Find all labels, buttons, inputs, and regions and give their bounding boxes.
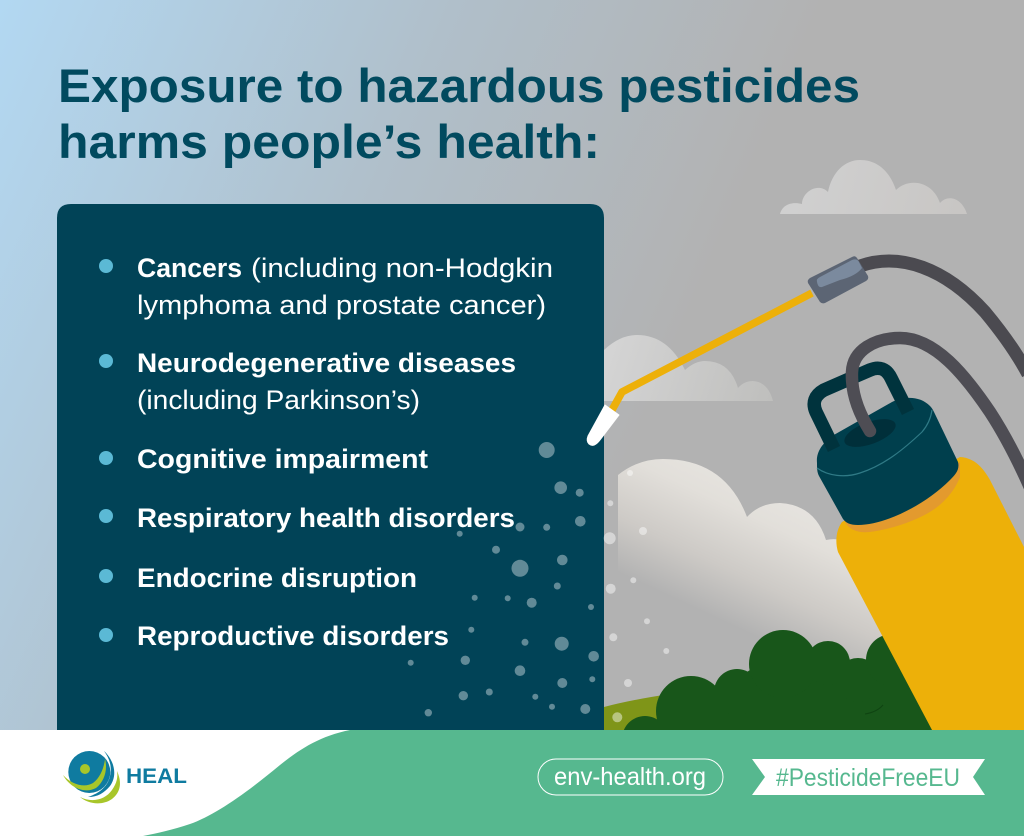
cap seam [817, 410, 932, 476]
footer band [0, 730, 1024, 836]
title: harms people’s health: [58, 115, 600, 168]
tank cap [817, 398, 958, 525]
list text: (including Parkinson’s) [137, 385, 420, 415]
grip highlight [817, 259, 862, 287]
spray wand [612, 293, 812, 410]
list text: lymphoma and prostate cancer) [137, 290, 546, 320]
wand grip [808, 256, 868, 303]
main list panel [57, 204, 604, 730]
list text: Respiratory health disorders [137, 503, 515, 533]
cloud: top right [780, 160, 967, 214]
logo globe [68, 751, 110, 793]
cloud: large [618, 459, 905, 680]
logo lower swoosh [80, 771, 120, 803]
website pill: env-health.org [554, 763, 706, 791]
list text: Neurodegenerative diseases [137, 348, 516, 378]
footer white wave [0, 730, 350, 836]
cap opening [841, 413, 899, 453]
nozzle [587, 405, 619, 445]
logo wordmark: HEAL [126, 765, 187, 788]
hashtag ribbon: #PesticideFreeEU [776, 764, 960, 792]
list text: Reproductive disorders [137, 621, 449, 651]
sprayer hose: wand side [860, 261, 1024, 374]
spray droplets outside panel [604, 470, 669, 722]
list text: Endocrine disruption [137, 563, 417, 593]
bullet markers [99, 259, 113, 642]
title: Exposure to hazardous pesticides [58, 59, 860, 112]
tank hose [852, 338, 1024, 492]
list text: Cancers [137, 253, 242, 283]
tank handle [814, 368, 908, 449]
list text: Cognitive impairment [137, 444, 428, 474]
logo blue arc [88, 751, 114, 797]
hashtag ribbon [752, 759, 985, 795]
tank rim [845, 462, 960, 532]
website pill [538, 759, 723, 795]
logo head dot [80, 764, 90, 774]
sprayer tank body [836, 457, 1024, 730]
hill [604, 694, 670, 730]
HEAL logo [63, 751, 187, 803]
title [58, 59, 860, 168]
list text: (including non-Hodgkin [251, 253, 553, 283]
logo figure swoosh [63, 759, 106, 790]
bushes [622, 630, 935, 762]
cloud: middle [604, 335, 773, 401]
spray droplets on panel [408, 442, 599, 716]
list text [137, 253, 553, 651]
